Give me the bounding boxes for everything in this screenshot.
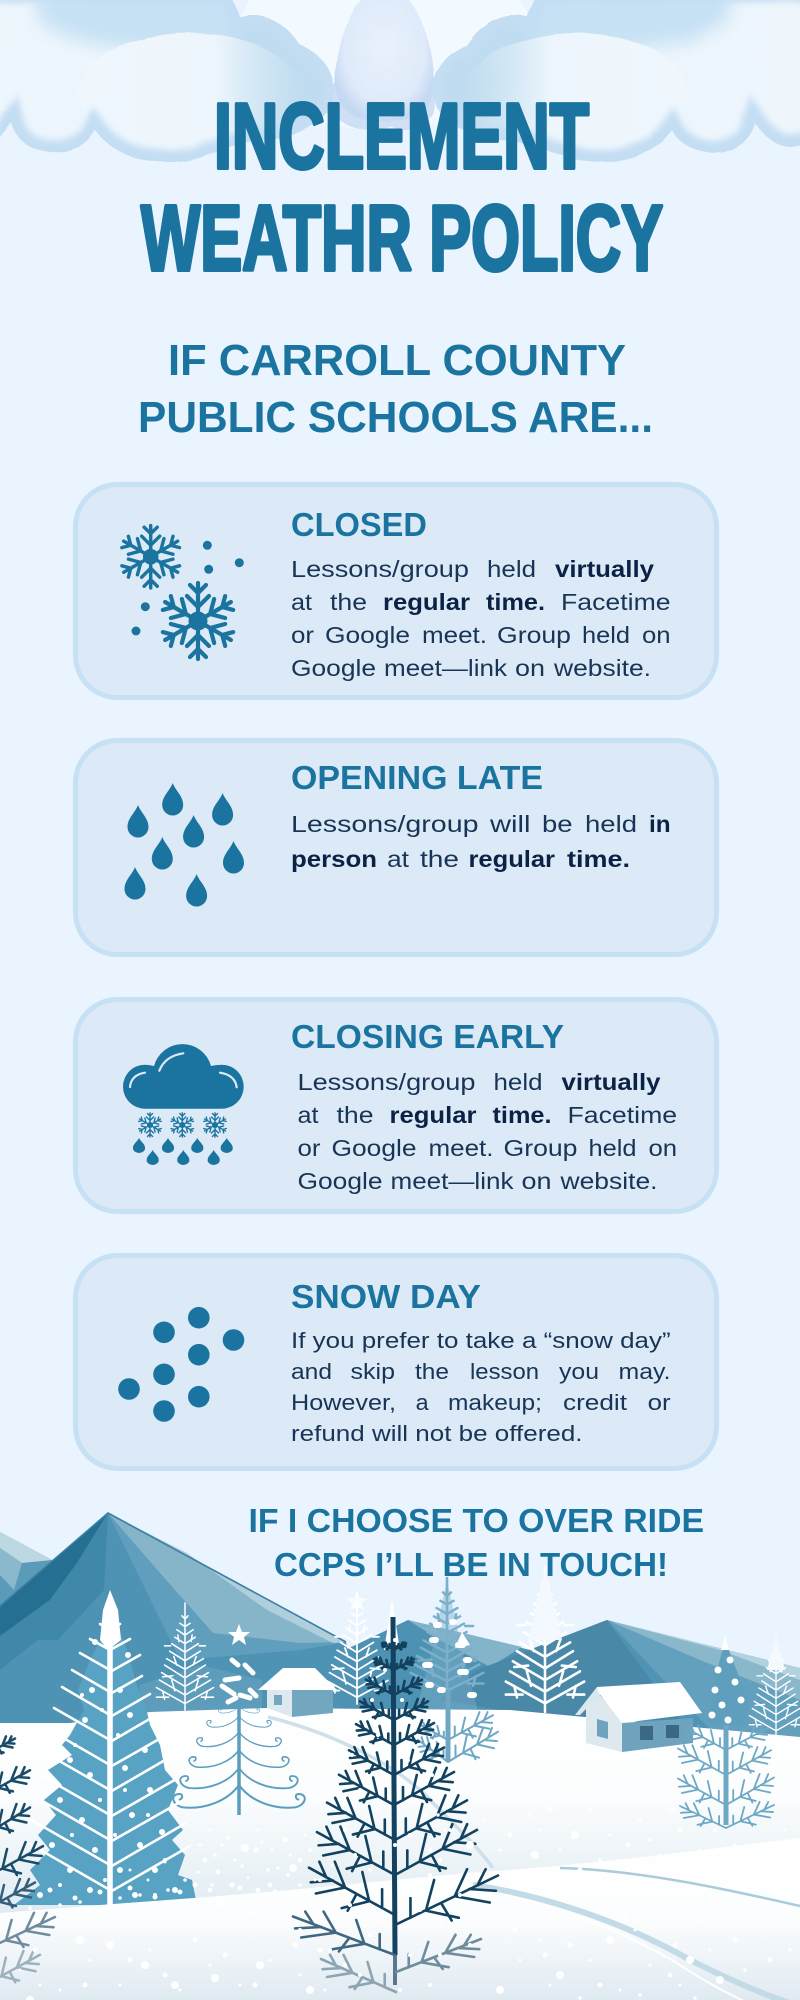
icon: snow dots [118, 1307, 244, 1422]
text: closing early body: Lessons/group [298, 1069, 476, 1095]
ghost white trees on the horizon [156, 1567, 800, 1737]
text: opening late body: Lessons/group [291, 811, 478, 837]
text: snow day body: However, [291, 1390, 396, 1415]
text: closed body: Group [497, 622, 571, 648]
text: closing early body: on [522, 1168, 552, 1194]
text: closed body: meet. [422, 622, 487, 648]
text: closed body: meet—link [384, 655, 508, 681]
text: closing early body: virtually [562, 1069, 661, 1095]
back left mountain [0, 1532, 52, 1640]
text: closed body: held [487, 556, 536, 582]
text: snow day body: you [559, 1359, 599, 1384]
road curves on the front hill [473, 1868, 800, 2000]
front snow hill [0, 1838, 800, 2000]
house: large [575, 1682, 702, 1752]
text: opening late body: will [489, 811, 530, 837]
text: closed body: at [291, 589, 313, 615]
watercolor clouds [0, 0, 800, 162]
text: opening late body: at [387, 846, 410, 872]
text: opening late body: held [585, 811, 637, 837]
text: opening late body: be [542, 811, 573, 837]
text: closing early body: at [298, 1102, 319, 1128]
text: snow day body: a [416, 1390, 429, 1415]
text: closed body: website. [553, 655, 651, 681]
house: small [258, 1668, 337, 1717]
text: closed body: regular [383, 589, 470, 615]
text: snow day body: the [415, 1359, 449, 1384]
tree: dark foreground fir [293, 1617, 498, 1992]
icon: snowflakes [119, 526, 244, 659]
subtitle: IF CARROLL COUNTY [168, 337, 626, 385]
panel: closing early [76, 1000, 716, 1212]
icon: rain drops [124, 783, 244, 906]
text: snow day body: If you prefer to take a “snow day” [291, 1328, 671, 1353]
text: closed body: held [582, 622, 630, 648]
heading: opening late: OPENING LATE [291, 759, 543, 796]
text: closed body: the [330, 589, 367, 615]
text: closed body: Facetime [561, 589, 671, 615]
closing message [248, 1502, 704, 1583]
text: closing early body: held [588, 1135, 636, 1161]
text: closed body: virtually [555, 556, 654, 582]
text: snow day body: or [648, 1390, 671, 1415]
tree: swirl tree with star [173, 1624, 305, 1815]
text: closed body: Google [325, 622, 410, 648]
text: snow day body: lesson [470, 1359, 539, 1384]
text: closing early body: Facetime [568, 1102, 677, 1128]
subtitle [138, 337, 653, 442]
text: opening late body: the [420, 846, 459, 872]
tree: upper blue tree with snow patches [411, 1578, 483, 1712]
text: closing early body: time. [492, 1102, 552, 1128]
icon: snow cloud [123, 1044, 244, 1165]
closing message: CCPS I’LL BE IN TOUCH! [274, 1546, 668, 1583]
closing message: IF I CHOOSE TO OVER RIDE [248, 1502, 704, 1539]
snowy ground [0, 1708, 800, 1930]
tree: blue branches lower [418, 1690, 498, 1762]
road curve on the far hill [268, 1717, 493, 1868]
text: closing early body: website. [559, 1168, 658, 1194]
text: opening late body: regular [468, 846, 555, 872]
text: closing early body: meet. [428, 1135, 494, 1161]
text: closing early body: Google [332, 1135, 416, 1161]
text: opening late body: time. [567, 846, 630, 872]
text: closing early body: the [336, 1102, 374, 1128]
text: opening late body: person [291, 846, 377, 872]
text: closing early body: on [648, 1135, 677, 1161]
text: snow day body: makeup; [448, 1390, 542, 1415]
tree: dark left edge fir [0, 1736, 55, 1985]
text: snow day body: and [291, 1359, 332, 1384]
text: closed body: Lessons/group [291, 556, 469, 582]
heading: closing early: CLOSING EARLY [291, 1018, 564, 1055]
text: closed body: time. [486, 589, 545, 615]
tree: big blue fir [14, 1590, 197, 1905]
title [141, 84, 663, 290]
text: closing early body [298, 1069, 677, 1194]
tree: right blue fir with snow [678, 1636, 774, 1828]
text: closing early body: held [494, 1069, 542, 1095]
text: closing early body: Group [504, 1135, 578, 1161]
text: closing early body: regular [390, 1102, 477, 1128]
heading: snow day: SNOW DAY [291, 1278, 481, 1315]
distant mountains [340, 1620, 800, 1740]
big mountain [0, 1513, 360, 1730]
text: snow day body: refund will not be offered. [291, 1421, 582, 1446]
text: opening late body: in [649, 811, 671, 837]
text: closing early body: or [298, 1135, 321, 1161]
text: closed body: on [515, 655, 545, 681]
text: closed body: Google [291, 655, 376, 681]
text: opening late body [291, 811, 671, 872]
text: closed body [291, 556, 671, 681]
winter landscape illustration [0, 1513, 800, 2000]
text: closing early body: Google [298, 1168, 382, 1194]
text: snow day body: skip [350, 1359, 395, 1384]
falling snow [20, 1640, 790, 2000]
subtitle: PUBLIC SCHOOLS ARE... [138, 394, 653, 442]
text: snow day body: may. [618, 1359, 670, 1384]
heading: closed: CLOSED [291, 506, 427, 543]
panel: closed [76, 484, 716, 698]
title: INCLEMENT [214, 84, 589, 188]
text: snow day body [291, 1328, 671, 1446]
text: snow day body: credit [563, 1390, 627, 1415]
text: closing early body: meet—link [390, 1168, 514, 1194]
panel: snow day [76, 1256, 716, 1468]
text: closed body: on [642, 622, 671, 648]
text: closed body: or [291, 622, 314, 648]
panel: opening late [76, 740, 716, 954]
